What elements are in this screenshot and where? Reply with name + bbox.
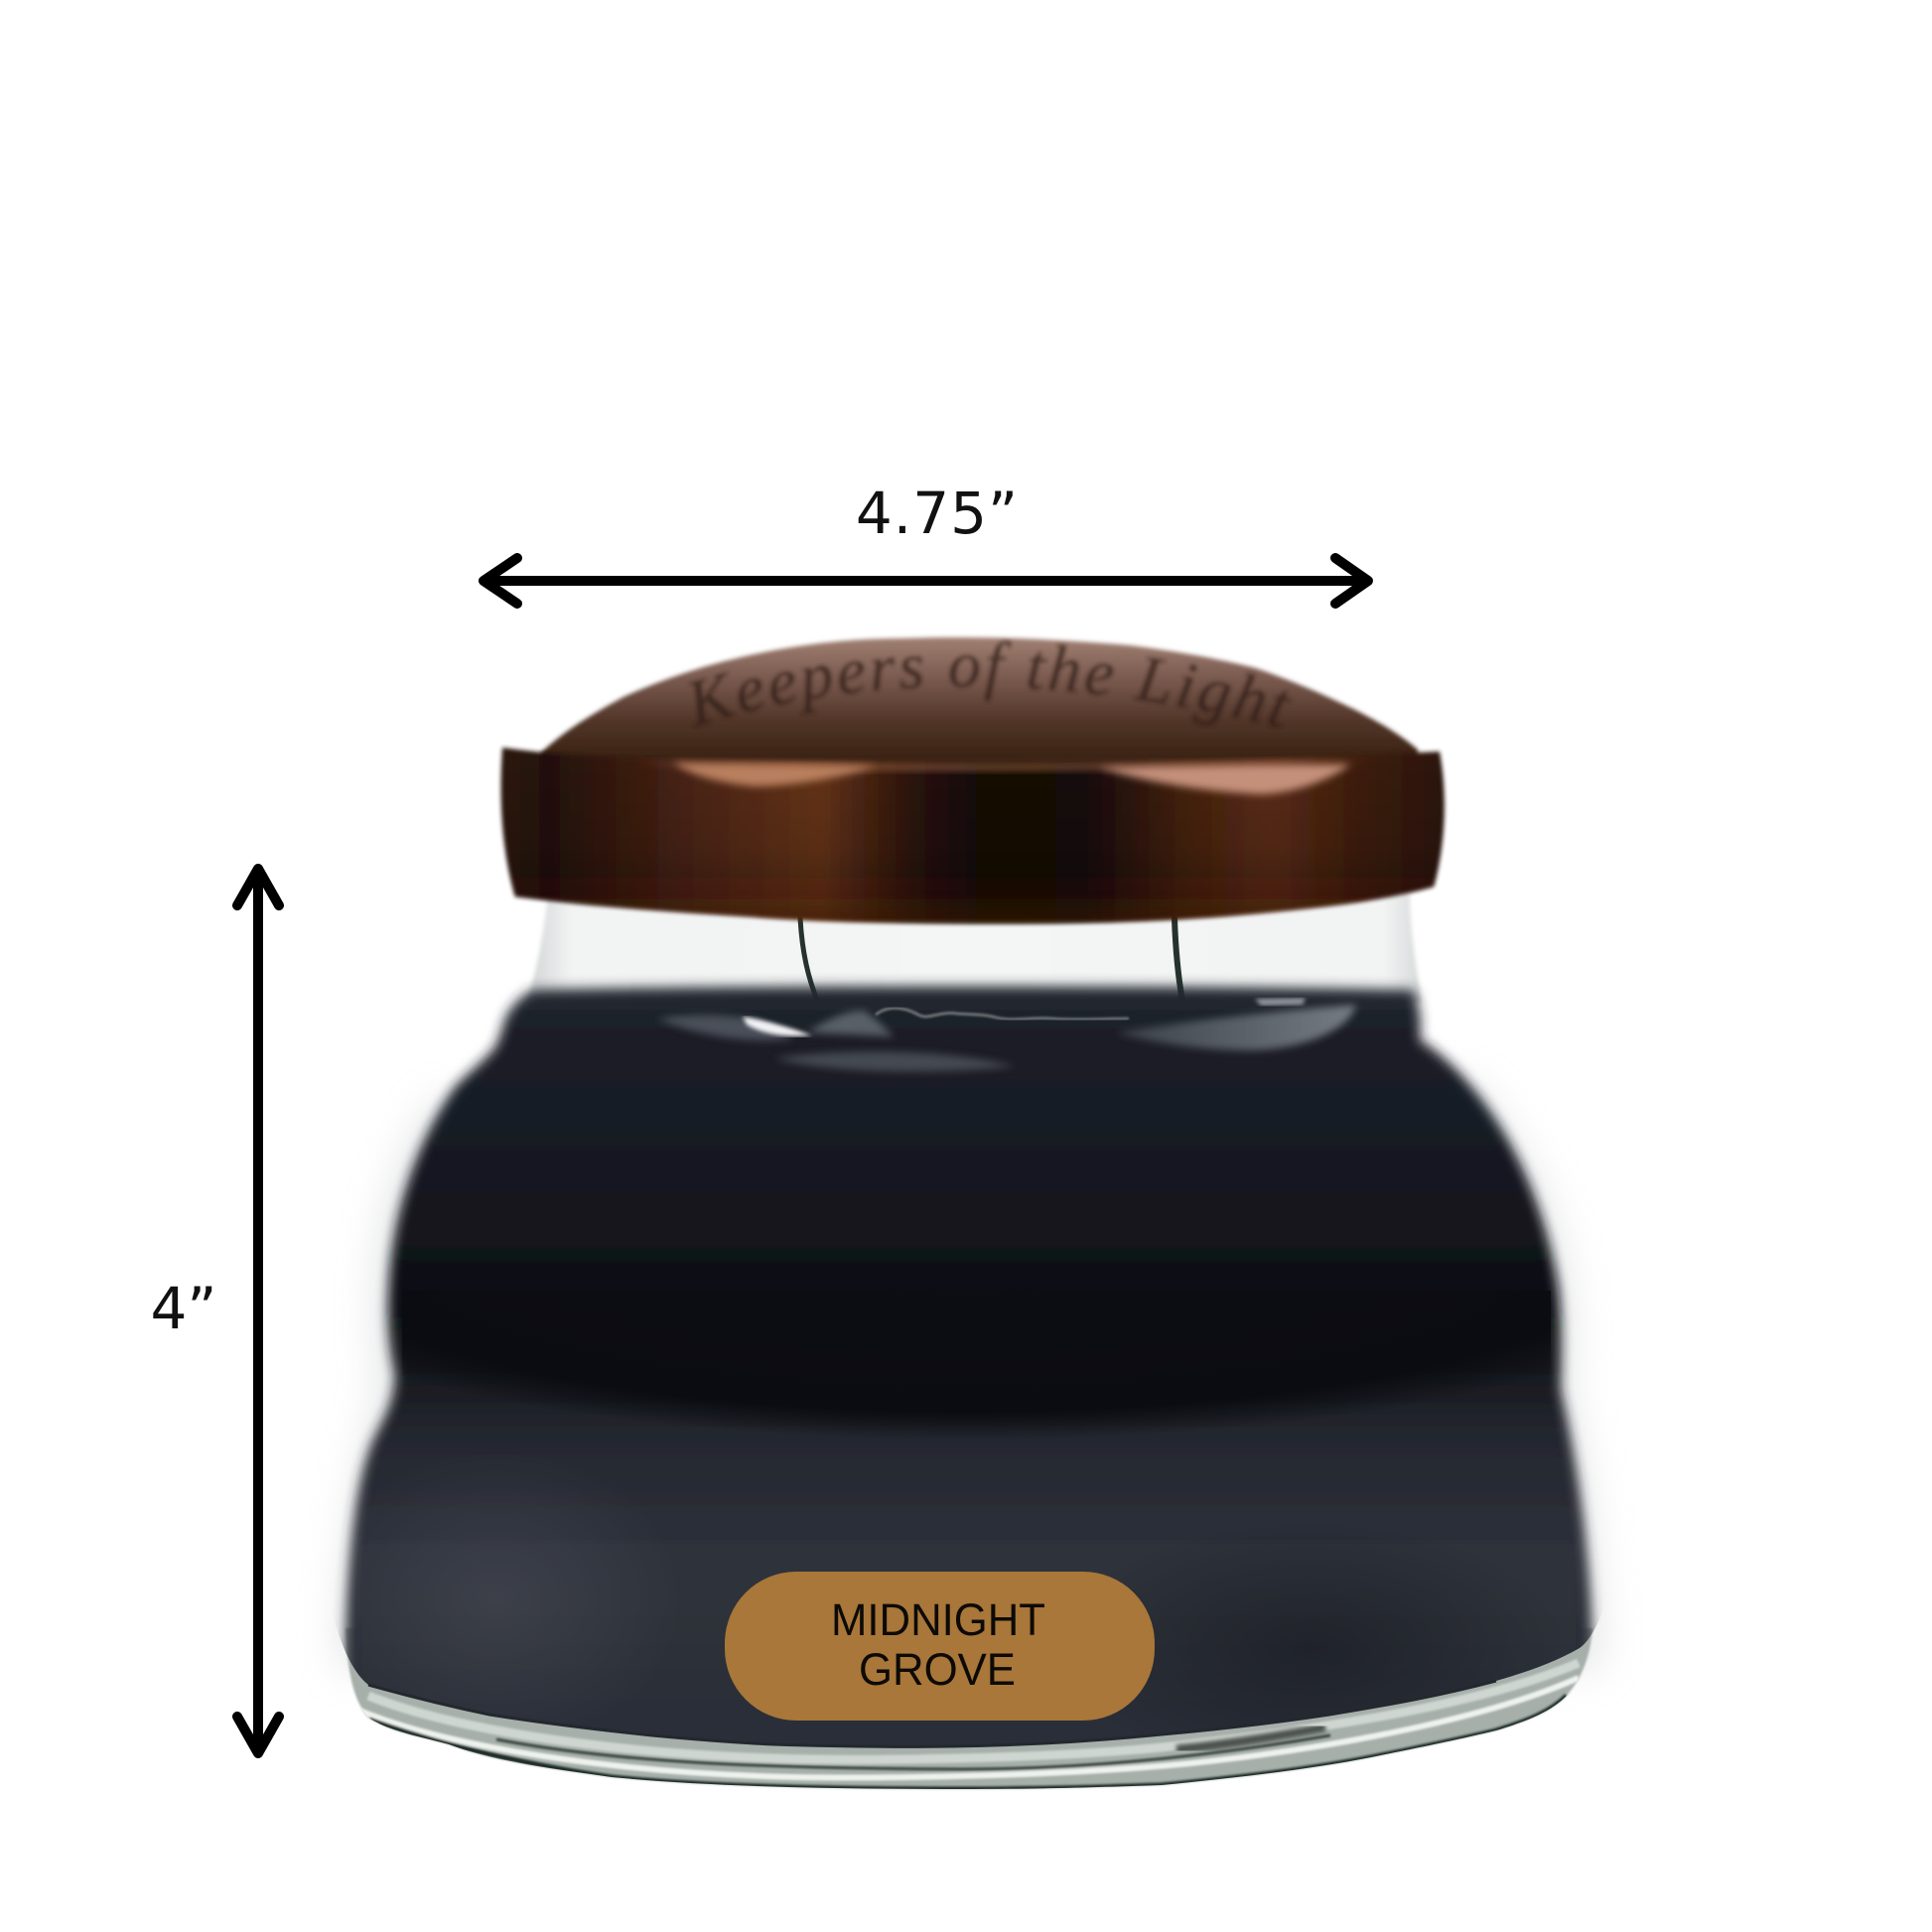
lid: [497, 633, 1448, 927]
lower right dark tone: [1197, 1585, 1424, 1704]
darkest wax band: [402, 1291, 1551, 1432]
lid band highlights: [635, 760, 1370, 794]
lid dome: [541, 637, 1418, 774]
wax bottom edge line: [368, 1681, 1496, 1746]
lower left light tone: [400, 1521, 594, 1676]
width label: 4.75”: [856, 480, 1019, 547]
candle jar: [238, 590, 1609, 1791]
left wick: [800, 918, 818, 1003]
glass base fill: [345, 1628, 1592, 1789]
right wick: [1174, 918, 1182, 1001]
white gleam: [743, 1017, 812, 1036]
left shine: [673, 762, 877, 786]
height label: 4”: [151, 1275, 216, 1342]
grey left gleam: [657, 1015, 794, 1040]
grey centre gleam: [806, 1011, 894, 1036]
lid band: [501, 748, 1445, 923]
height arrow: [237, 869, 279, 1753]
top edge strip: [635, 760, 1370, 769]
wax body: [336, 975, 1602, 1745]
right shine: [1098, 764, 1351, 794]
wax fill: [345, 986, 1592, 1777]
glass base: [345, 1628, 1592, 1789]
lower smear: [774, 1051, 1015, 1071]
wicks: [800, 918, 1182, 1003]
glass neck: [526, 894, 1422, 1003]
label plate: [725, 1572, 1155, 1721]
width arrow: [483, 558, 1368, 604]
wax highlights: [657, 998, 1356, 1071]
wavy wax line: [876, 1008, 1129, 1020]
soft glass halo around jar: [340, 1082, 1600, 1668]
label text: MIDNIGHT: [831, 1594, 1045, 1645]
engraved lid text: Keepers of the Light: [689, 638, 1292, 728]
infographic canvas: [153, 490, 1609, 1791]
label: [725, 1572, 1155, 1721]
right gleam: [1116, 1005, 1356, 1050]
glass stripes: [357, 1663, 1579, 1789]
lid band shading: [501, 748, 1445, 923]
label text: [831, 1594, 1045, 1695]
label text: GROVE: [859, 1644, 1016, 1695]
small top gleam: [1255, 998, 1306, 1006]
